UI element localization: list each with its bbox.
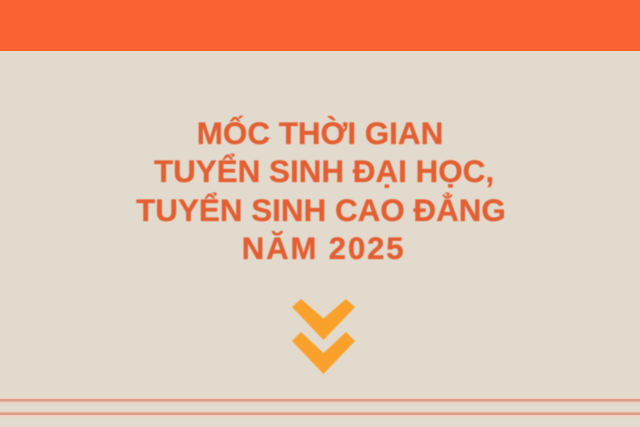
header band [0,0,640,51]
title: NĂM 2025 [242,231,405,266]
title: TUYỂN SINH ĐẠI HỌC, [154,154,494,189]
icon: double chevron down [292,299,355,374]
title: MỐC THỜI GIAN [197,115,443,151]
title [136,115,506,266]
title: TUYỂN SINH CAO ĐẲNG [136,193,506,228]
